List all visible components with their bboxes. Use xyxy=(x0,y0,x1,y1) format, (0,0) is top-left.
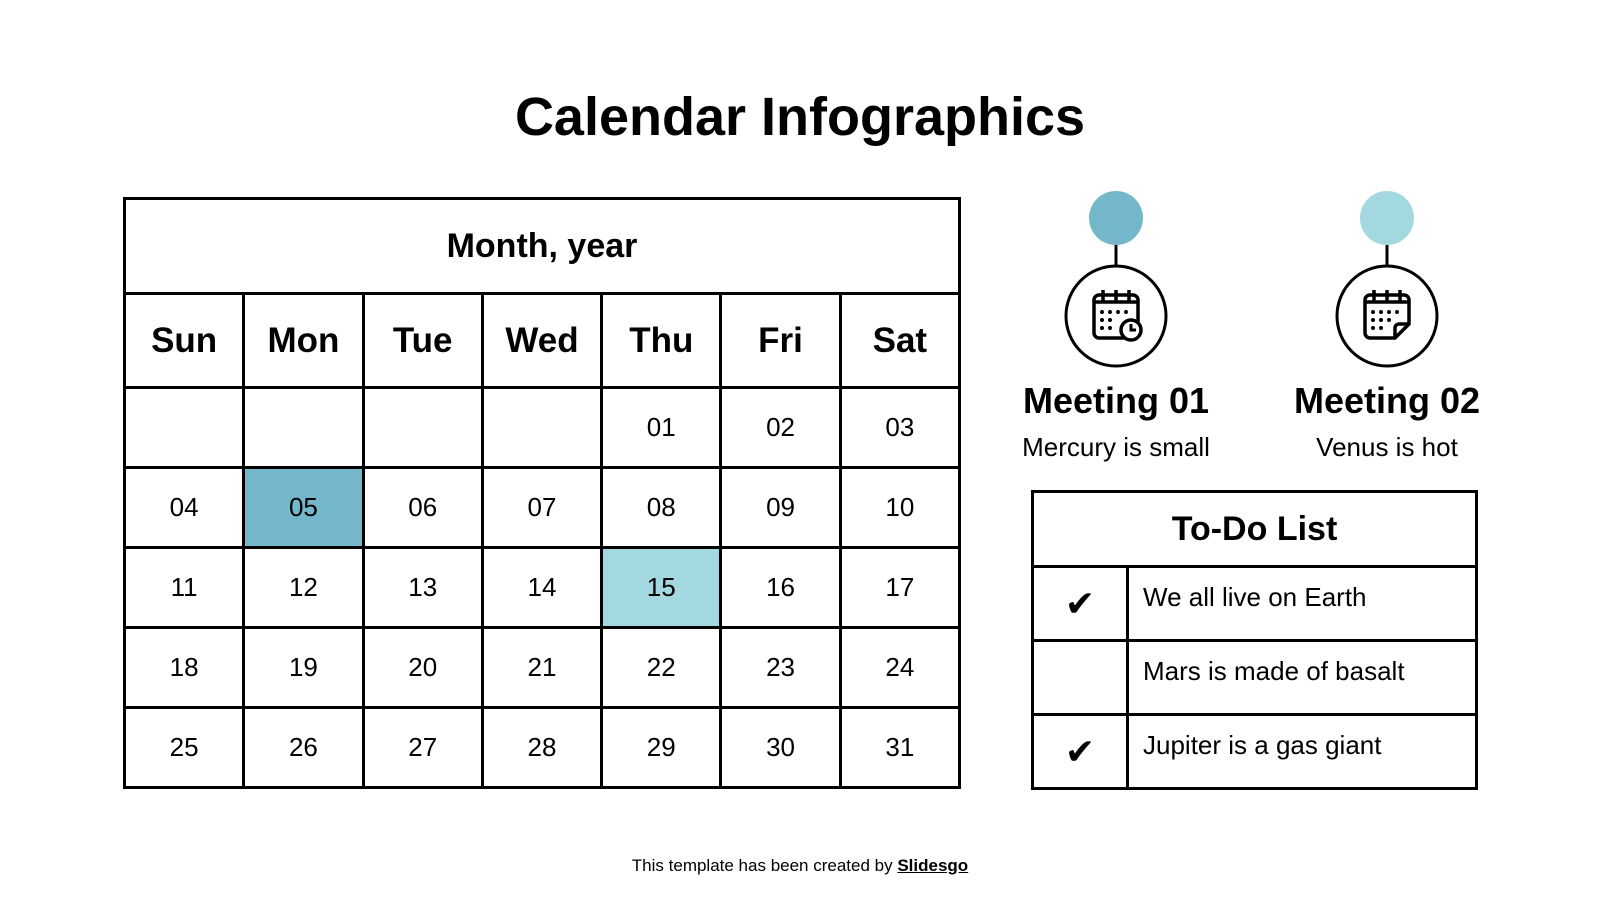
footer: This template has been created by Slidesgo xyxy=(632,856,968,875)
calendar table: Mon xyxy=(267,320,339,360)
calendar table: 01 xyxy=(647,412,676,442)
calendar table: Thu xyxy=(629,320,693,360)
meeting 01 text: Mercury is small xyxy=(1022,432,1210,462)
calendar table: 07 xyxy=(528,492,556,522)
calendar table: 16 xyxy=(766,572,795,602)
calendar table: 22 xyxy=(647,652,676,682)
meeting 02 text: Venus is hot xyxy=(1316,432,1458,462)
calendar table: 03 xyxy=(885,412,914,442)
icon: calendar clock xyxy=(1064,191,1168,368)
to-do list: ✔ xyxy=(1065,582,1095,624)
calendar table: 26 xyxy=(289,732,318,762)
calendar table xyxy=(123,197,961,789)
title: Calendar Infographics xyxy=(515,87,1085,147)
to-do list: We all live on Earth xyxy=(1143,582,1367,612)
calendar table: 23 xyxy=(766,652,795,682)
calendar table: Sun xyxy=(151,320,217,360)
calendar table: 28 xyxy=(528,732,556,762)
to-do list: Jupiter is a gas giant xyxy=(1143,730,1381,760)
calendar table: Sat xyxy=(873,320,927,360)
calendar table: 27 xyxy=(408,732,437,762)
calendar table: 21 xyxy=(528,652,556,682)
calendar table: 12 xyxy=(289,572,318,602)
calendar table: 31 xyxy=(885,732,914,762)
calendar table: 15 xyxy=(647,572,676,602)
calendar table: Fri xyxy=(758,320,803,360)
calendar table: 05 xyxy=(289,492,318,522)
calendar table: 29 xyxy=(647,732,676,762)
calendar table: Month, year xyxy=(447,226,637,264)
to-do list: ✔ xyxy=(1065,730,1095,772)
calendar table: 04 xyxy=(170,492,199,522)
calendar table: 13 xyxy=(408,572,437,602)
calendar table: 11 xyxy=(171,572,198,602)
calendar table: 25 xyxy=(170,732,199,762)
calendar table: 17 xyxy=(885,572,914,602)
icon: calendar note xyxy=(1336,191,1438,368)
calendar table: Tue xyxy=(393,320,453,360)
calendar table: 18 xyxy=(170,652,199,682)
calendar table: 10 xyxy=(885,492,914,522)
to-do list: To-Do List xyxy=(1172,510,1337,548)
calendar table: 30 xyxy=(766,732,795,762)
meeting 01 heading: Meeting 01 xyxy=(1023,380,1209,421)
calendar table: 02 xyxy=(766,412,795,442)
calendar table: 06 xyxy=(408,492,437,522)
calendar table: 19 xyxy=(289,652,318,682)
to-do list: Mars is made of basalt xyxy=(1143,656,1405,686)
calendar table: 14 xyxy=(528,572,556,602)
meeting 01 xyxy=(1022,191,1210,462)
to-do list xyxy=(1031,490,1478,790)
meeting 02 heading: Meeting 02 xyxy=(1294,380,1480,421)
calendar table: Wed xyxy=(505,320,579,360)
calendar table: 08 xyxy=(647,492,676,522)
meeting 02 xyxy=(1294,191,1480,462)
calendar table: 24 xyxy=(885,652,914,682)
calendar table: 20 xyxy=(408,652,437,682)
calendar table: 09 xyxy=(766,492,795,522)
